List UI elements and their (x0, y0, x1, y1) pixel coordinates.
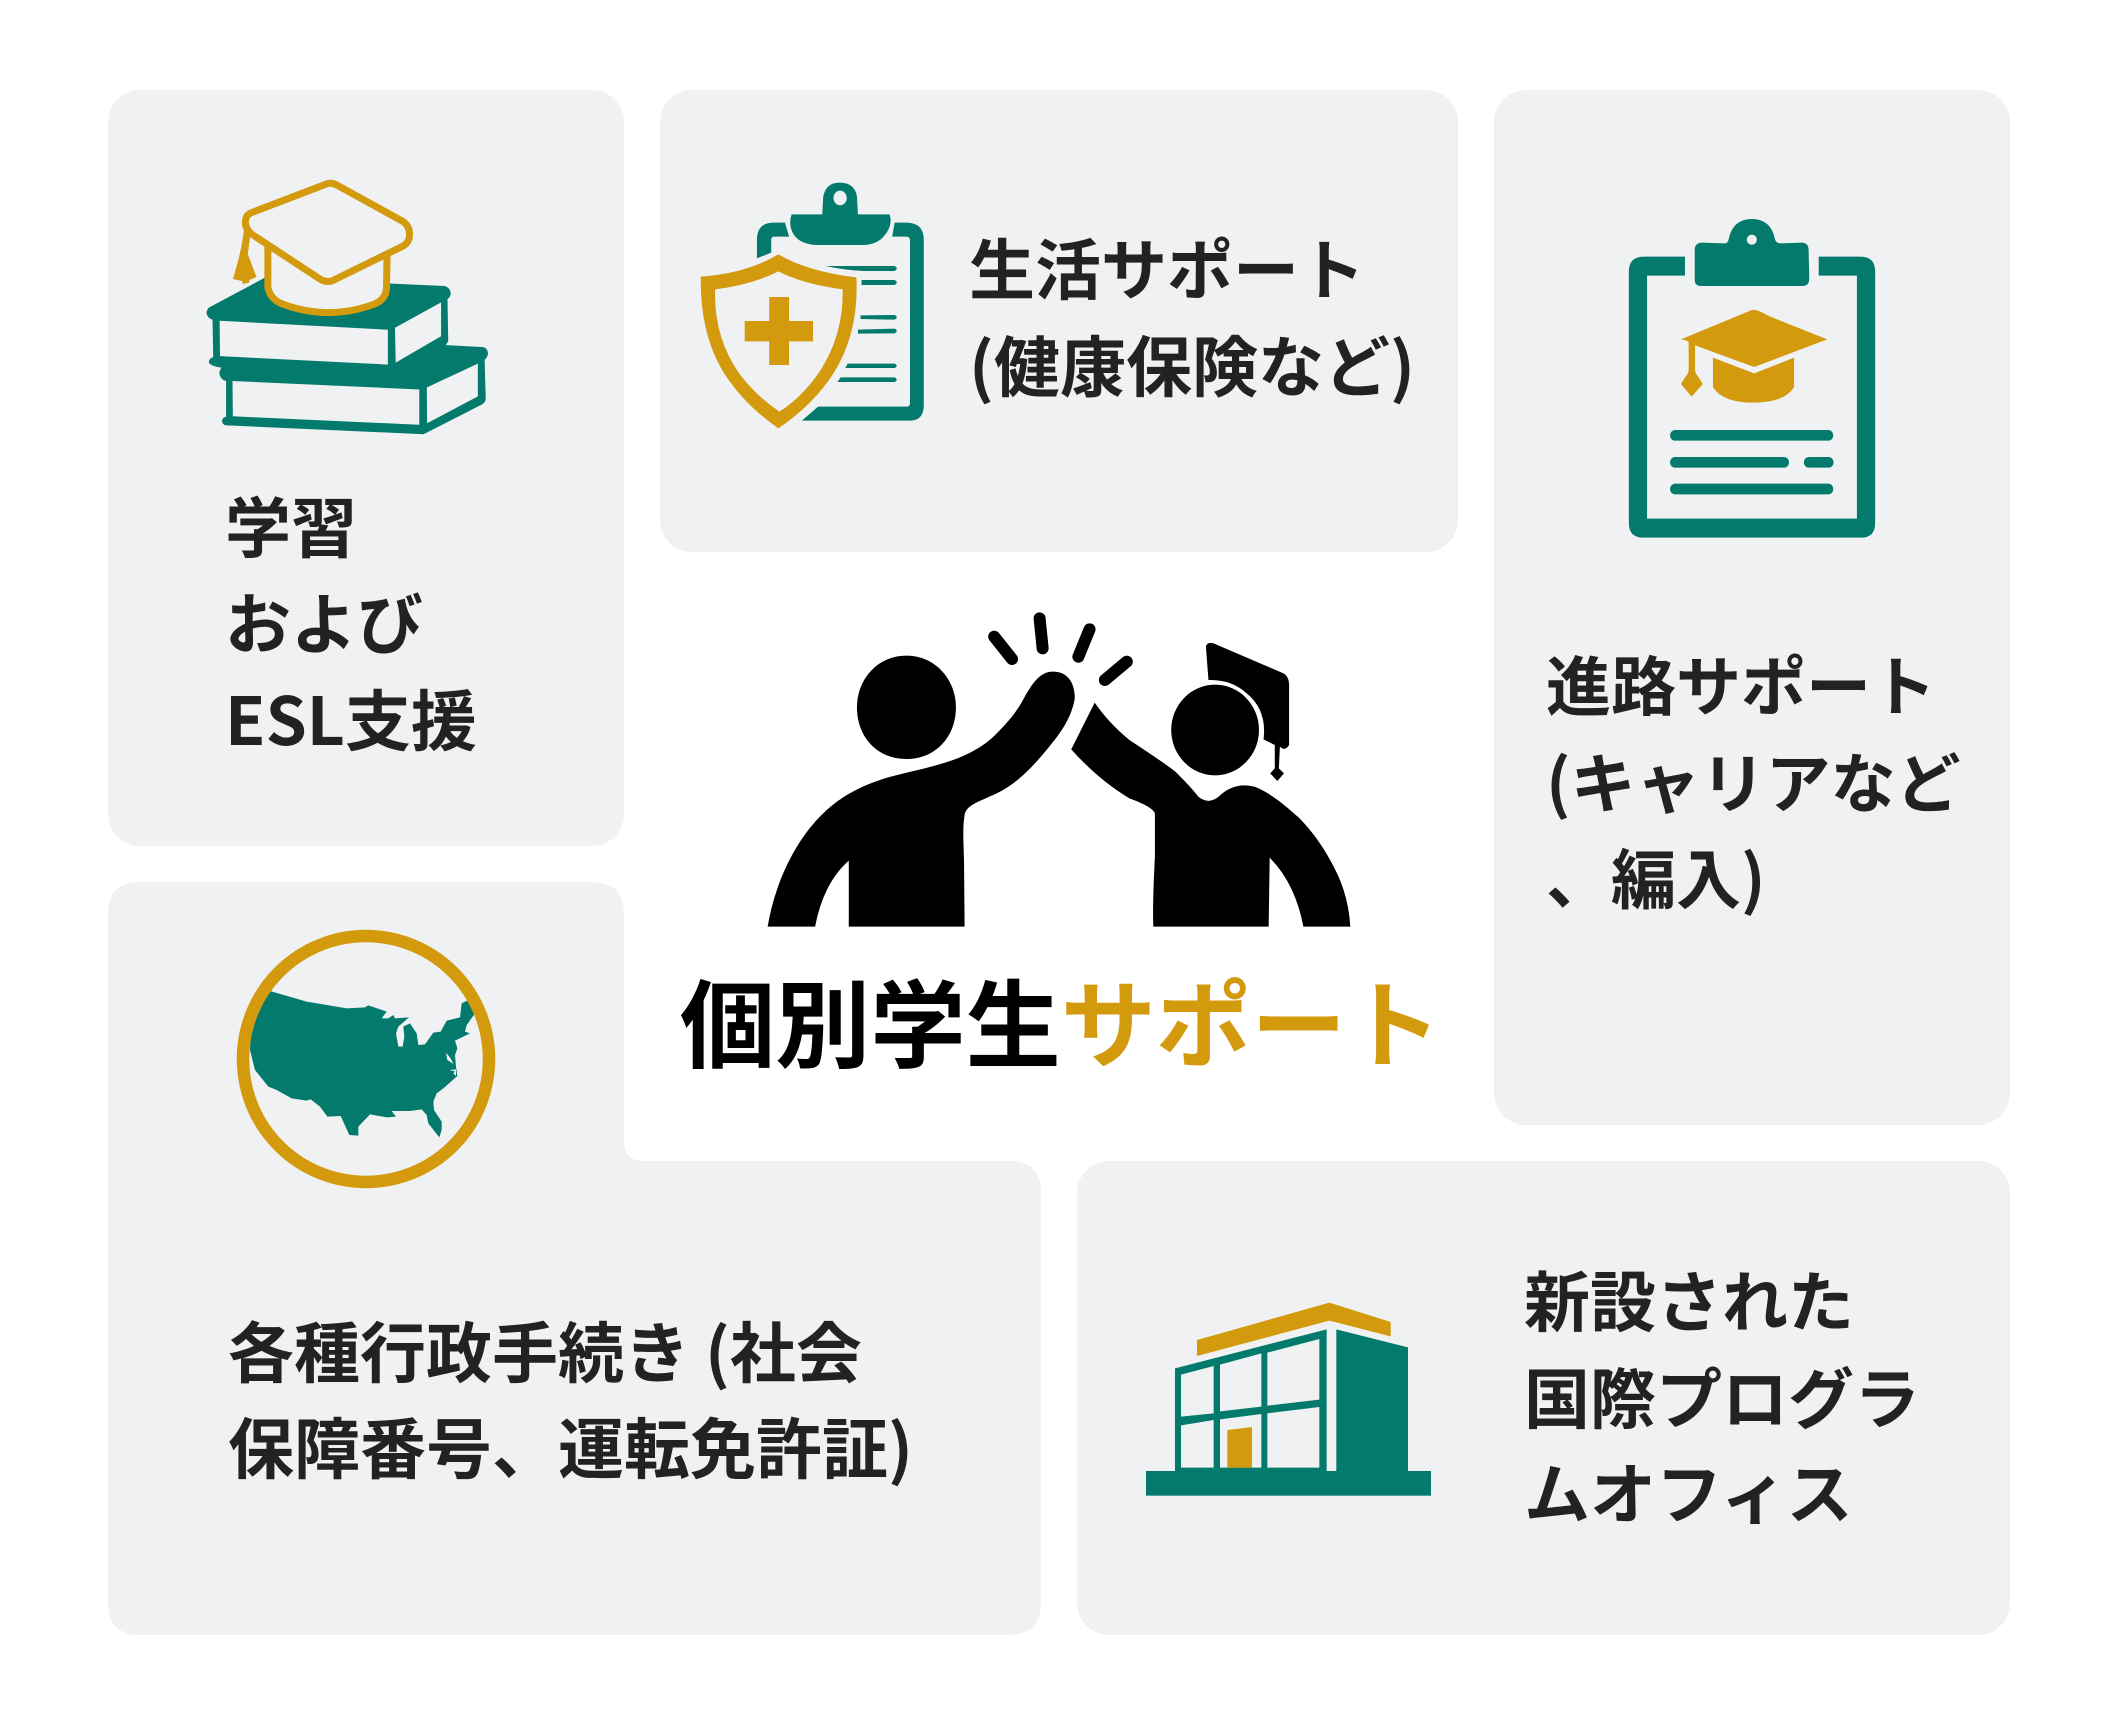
text: career support (1546, 635, 1961, 922)
text: career support: 、編入) (1546, 828, 1766, 922)
text: career support: (キャリアなど (1546, 732, 1961, 826)
card background: life support (660, 90, 1458, 552)
text: program office: 国際プログラ (1524, 1347, 1920, 1443)
text: life support (969, 218, 1415, 411)
title: 個別学生サポート (680, 951, 1442, 1088)
text: program office (1524, 1250, 1920, 1538)
panel: new international program office (1077, 1161, 2010, 1635)
icon: clipboard with graduation cap (1629, 219, 1875, 538)
text: life support: 生活サポート (969, 218, 1365, 314)
card background: L-shaped (108, 882, 1041, 1635)
text: program office: ムオフィス (1524, 1442, 1853, 1538)
card background: study (108, 90, 624, 846)
text: life support: (健康保険など) (969, 315, 1415, 411)
text: study and ESL support: ESL支援 (225, 669, 477, 765)
text: program office: 新設された (1524, 1250, 1854, 1346)
text: study and ESL support: および (225, 572, 423, 668)
icon: clipboard with shield (701, 183, 924, 428)
icon: office building (1146, 1303, 1431, 1496)
icon: books with graduation cap (206, 183, 488, 434)
panel: life support (660, 90, 1458, 552)
panel: administrative procedures (108, 882, 1041, 1635)
text: study and ESL support (225, 476, 477, 765)
text: administrative procedures (228, 1301, 913, 1493)
card background: program office (1077, 1161, 2010, 1635)
text: career support: 進路サポート (1546, 635, 1936, 729)
text: administrative procedures: 各種行政手続き (社会 (228, 1301, 862, 1397)
icon: map of the United States in a ring (243, 936, 489, 1182)
icon: student and person high five (768, 618, 1350, 927)
text: administrative procedures: 保障番号、運転免許証) (228, 1397, 913, 1493)
panel: career support (1494, 90, 2010, 1125)
panel: study and ESL support (108, 90, 624, 846)
text: study and ESL support: 学習 (225, 476, 357, 572)
card background: career support (1494, 90, 2010, 1125)
